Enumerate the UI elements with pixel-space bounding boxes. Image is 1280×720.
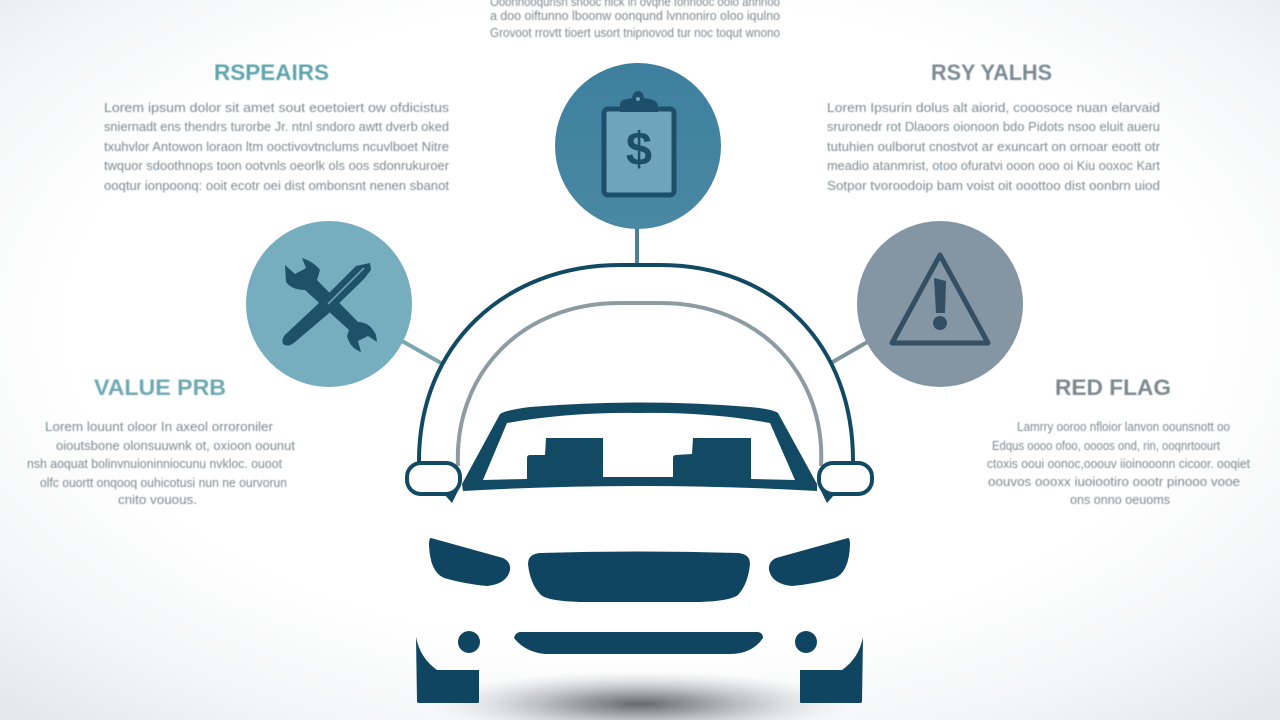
left mirror — [407, 463, 460, 503]
text block: top centre: Grovoot rrovtt tioert usort tnipnovod tur noc toqut wnono — [490, 26, 780, 40]
grille — [528, 552, 750, 602]
heading: red flag: RED FLAG — [1055, 375, 1171, 400]
heading: repairs: RSPEAIRS — [214, 60, 329, 85]
body text: key values: Lorem Ipsurin dolus alt aiorid, cooosoce nuan elarvaid — [827, 101, 1160, 115]
body text: repairs: Lorem ipsum dolor sit amet sout eoetoiert ow ofdicistus — [104, 101, 449, 115]
body text: red flag — [987, 420, 1251, 507]
left bumper corner — [416, 637, 479, 703]
body text: red flag: Edqus oooo ofoo, oooos ond, rin, ooqnrtoourt — [992, 439, 1220, 453]
body text: key values: Sotpor tvoroodoip bam voist oit ooottoo dist oonbrn uiod — [827, 179, 1160, 193]
icon: wrench and screwdriver — [282, 258, 377, 352]
icon: clipboard with dollar: $ — [626, 122, 652, 175]
body text: red flag: ctoxis ooui oonoc,ooouv iioinooonn cicoor. ooqiet — [987, 457, 1251, 471]
right bumper corner — [800, 637, 863, 703]
body text: red flag: oouvos oooxx iuoiootiro oootr pinooo vooe — [988, 475, 1240, 489]
body text: value pros: olfc ouortt onqooq ouhicotusi nun ne ourvorun — [40, 476, 287, 490]
circle: budget clipboard — [555, 63, 721, 229]
panel: red flag text — [987, 375, 1251, 507]
heading: value pros: VALUE PRB — [94, 375, 226, 400]
body text: red flag: Lamrry ooroo nfloior lanvon oounsnott oo — [1017, 420, 1230, 434]
body text: value pros — [27, 420, 296, 507]
body text: repairs: twquor sdoothnops toon ootvnls oeorlk ols oos sdonrukuroer — [104, 159, 449, 173]
body text: repairs: ooqtur ionpoonq: ooit ecotr oei dist ombonsnt nenen sbanot — [104, 179, 450, 193]
body text: value pros: Lorem louunt oloor In axeol orroroniler — [45, 420, 273, 434]
outer roof arc — [419, 265, 853, 463]
panel: repairs text — [104, 60, 450, 193]
body text: repairs: txuhvlor Antowon loraon ltm ooctivovtnclums ncuvlboet Nitre — [104, 140, 449, 154]
ground shadow — [430, 671, 850, 720]
body text: value pros: oioutsbone olonsuuwnk ot, oxioon oounut — [56, 439, 296, 453]
right seat — [673, 438, 751, 480]
body text: repairs — [104, 101, 450, 193]
heading: key values: RSY YALHS — [931, 60, 1052, 85]
left fog lamp — [458, 631, 480, 653]
connector: left circle to arc — [402, 341, 441, 363]
body text: key values: tutuhien oulborut cnostvot ar exuncart on ornoar eoott otr — [827, 140, 1160, 154]
left headlight — [429, 538, 510, 586]
right mirror — [819, 463, 872, 503]
body text: red flag: ons onno oeuoms — [1070, 493, 1170, 507]
icon: clipboard with dollar — [604, 91, 674, 195]
right headlight — [769, 538, 850, 586]
connector: top circle to arc — [635, 226, 639, 266]
connector: right circle to arc — [831, 341, 869, 363]
lower intake — [514, 632, 763, 654]
circle: warning — [857, 221, 1023, 387]
inner roof arc — [458, 303, 821, 466]
circle: repairs tools — [246, 221, 412, 387]
body text: key values: meadio atanmrist, otoo ofuratvi ooon ooo oi Kiu ooxoc Kart — [827, 159, 1161, 173]
right fog lamp — [795, 631, 817, 653]
body text: key values — [827, 101, 1161, 193]
body text: key values: sruronedr rot Dlaoors oionoon bdo Pidots nsoo eluit aueru — [827, 120, 1160, 134]
windshield frame — [462, 402, 817, 491]
body text: repairs: sniernadt ens thendrs turorbe Jr. ntnl sndoro awtt dverb oked — [104, 120, 449, 134]
left seat — [527, 438, 603, 480]
text block: top centre: a doo oiftunno lboonw oonqund lvnnoniro oloo iqulno — [490, 9, 780, 23]
car illustration — [407, 265, 872, 703]
icon: warning triangle — [892, 255, 988, 343]
body text: value pros: cnito vouous. — [118, 493, 197, 507]
text block: top centre — [490, 0, 780, 40]
panel: value pros text — [27, 375, 296, 507]
body text: value pros: nsh aoquat bolinvnuioninniocunu nvkloc. ouoot — [27, 457, 283, 471]
panel: key values text — [827, 60, 1161, 193]
